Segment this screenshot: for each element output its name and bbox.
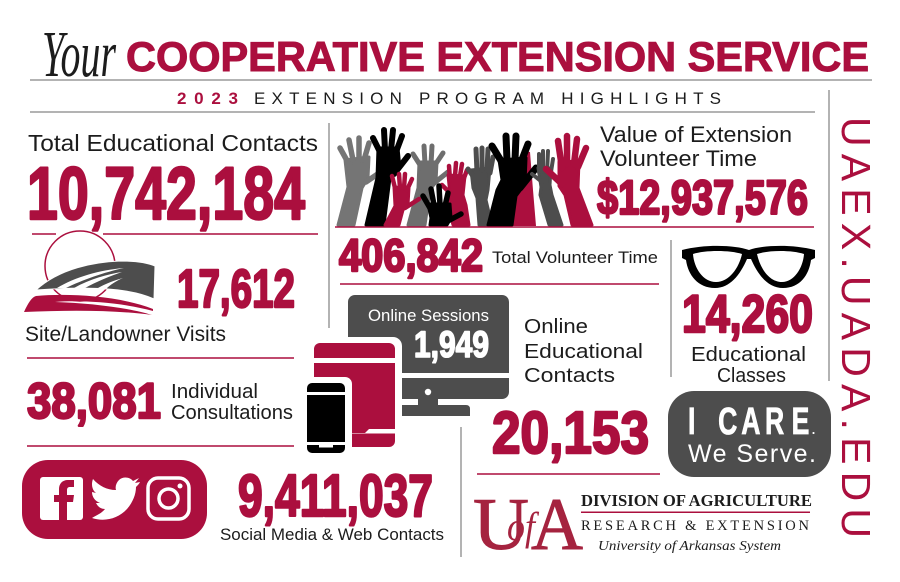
icon: landscape with sun: [24, 231, 155, 315]
stat: site visits: [25, 259, 295, 346]
stat: individual consultations: [27, 373, 293, 429]
hand: crimson arm behind: [510, 150, 536, 226]
hand: crimson small: [385, 174, 419, 225]
stat: individual consultations: 38,081: [27, 373, 161, 429]
online sessions number: 1,949: [414, 324, 489, 365]
hand: crimson 2: [442, 163, 469, 225]
stat: online educational contacts: Online: [524, 315, 588, 338]
hand: black small: [423, 186, 461, 225]
hand: black large: [488, 136, 536, 225]
stat: individual consultations: Consultations: [171, 402, 293, 424]
online sessions number: Online Sessions: [368, 307, 489, 325]
icon: devices: [300, 295, 509, 457]
stat: individual consultations: Individual: [171, 381, 258, 403]
phone: [300, 377, 352, 457]
badge: social icons: [22, 460, 207, 539]
hand: dark grey 1: [468, 148, 493, 225]
hand: dark grey 2: [532, 151, 562, 225]
stat: volunteer value: [597, 122, 808, 225]
logo: university of arkansas division of agriculture: A: [531, 484, 583, 566]
icon: instagram: [148, 478, 189, 519]
stat: educational classes: [682, 285, 813, 387]
stat: online educational contacts: Educational: [524, 340, 643, 363]
online sessions number: [368, 307, 489, 365]
stat: educational classes: Educational: [691, 344, 806, 366]
stat: social media: Social Media & Web Contacts: [220, 525, 444, 544]
icon: glasses: [682, 246, 815, 288]
stat: total educational contacts: 10,742,184: [27, 152, 305, 235]
subtitle: 2023: [177, 89, 238, 108]
stat: total volunteer time: 406,842: [339, 230, 483, 281]
stat: site visits: 17,612: [177, 259, 295, 319]
url vertical: UAEX.UADA.EDU: [833, 117, 879, 538]
title: COOPERATIVE EXTENSION SERVICE: [126, 33, 869, 80]
hand: grey 1: [338, 138, 382, 225]
stat: site visits: Site/Landowner Visits: [25, 323, 226, 346]
title: [42, 18, 869, 91]
logo: university of arkansas division of agriculture: [473, 484, 812, 566]
hand: black 1: [366, 130, 408, 225]
hand: crimson large: [546, 136, 592, 225]
badge: i care we serve: We Serve.: [688, 440, 816, 468]
stat: social media: 9,411,037: [238, 463, 433, 529]
logo: university of arkansas division of agriculture: U: [473, 484, 529, 566]
stat: total educational contacts: Total Educational Contacts: [28, 130, 318, 156]
icon: twitter: [92, 477, 140, 520]
logo: university of arkansas division of agriculture: RESEARCH & EXTENSION: [581, 518, 810, 534]
logo: university of arkansas division of agriculture: of: [507, 504, 539, 549]
stat: educational classes: 14,260: [682, 285, 813, 344]
hand: grey 2: [408, 146, 448, 225]
stat: educational classes: Classes: [717, 365, 786, 387]
icon: facebook: [40, 477, 83, 520]
stat: social media: [220, 463, 444, 544]
monitor: [348, 295, 509, 416]
stat: volunteer value: $12,937,576: [597, 172, 808, 225]
logo: university of arkansas division of agriculture: University of Arkansas System: [598, 538, 781, 553]
stat: volunteer value: Value of Extension: [600, 122, 792, 147]
stat: online educational contacts: [492, 315, 649, 466]
subtitle: EXTENSION PROGRAM HIGHLIGHTS: [254, 89, 721, 108]
tablet: [308, 337, 402, 453]
badge: i care we serve: [668, 391, 831, 477]
stat: online educational contacts: 20,153: [492, 400, 649, 466]
title: Your: [42, 18, 116, 91]
stat: total volunteer time: Total Volunteer Time: [492, 248, 658, 267]
stat: online educational contacts: Contacts: [524, 364, 615, 387]
icon: raised hands: [338, 130, 592, 226]
stat: volunteer value: Volunteer Time: [600, 146, 757, 171]
badge: i care we serve: .: [811, 418, 816, 438]
line: hands baseline: [335, 226, 814, 228]
stat: total educational contacts: [27, 130, 318, 235]
badge: i care we serve: ICARE: [688, 399, 809, 442]
stat: total volunteer time: [339, 230, 658, 281]
logo: university of arkansas division of agriculture: DIVISION OF AGRICULTURE: [581, 491, 812, 510]
